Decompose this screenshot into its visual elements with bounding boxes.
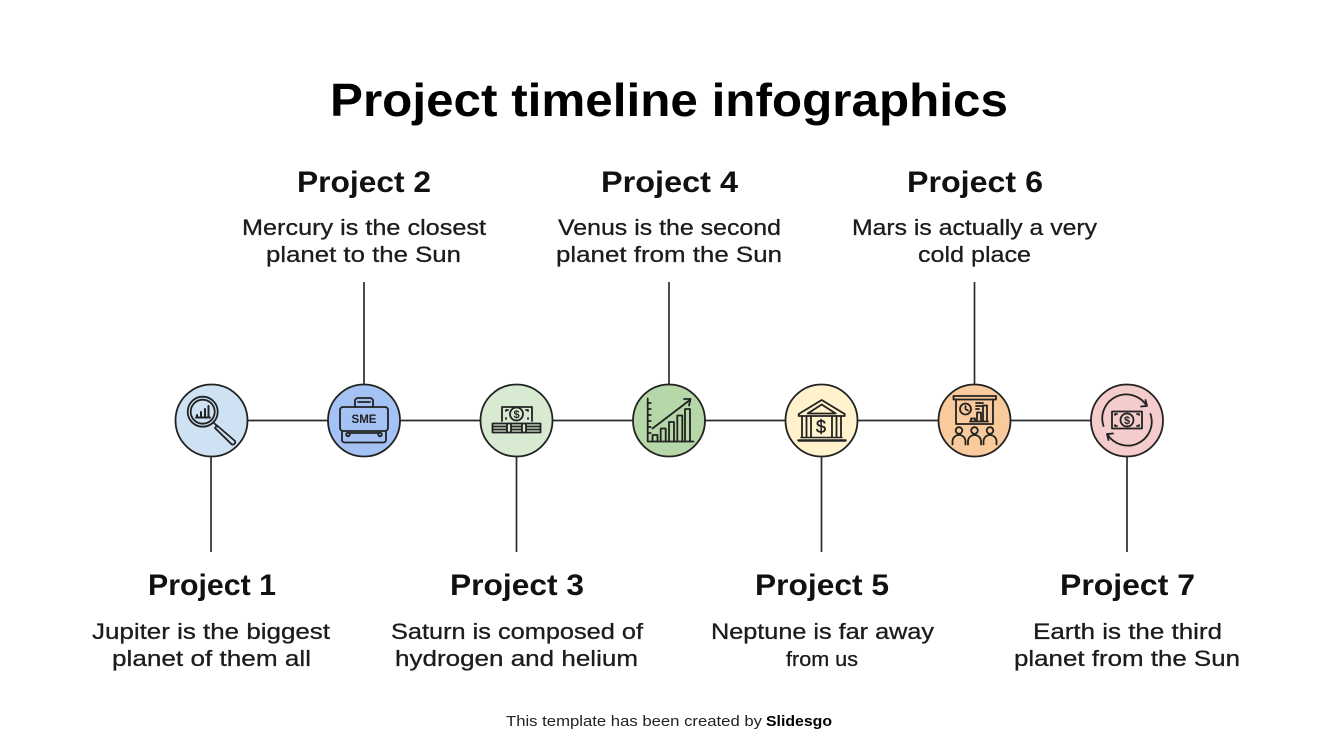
label: project 1 (92, 569, 331, 671)
icon: circulating banknote: $ (1124, 415, 1130, 427)
label: project 5: Project 5 (755, 569, 889, 602)
icon: bank building: $ (816, 417, 826, 437)
label: project 2: planet to the Sun (266, 242, 461, 267)
label: project 6: cold place (918, 242, 1031, 267)
label: project 2: Project 2 (297, 166, 431, 199)
label: project 6: Mars is actually a very (852, 215, 1098, 240)
label: project 4: planet from the Sun (556, 242, 782, 267)
icon: rising bar chart with arrow (648, 398, 694, 442)
label: project 7 (1014, 569, 1240, 671)
label: project 7: Project 7 (1060, 569, 1195, 602)
label: project 1: Jupiter is the biggest (92, 619, 331, 644)
milestone 5: project 5 (711, 384, 935, 671)
label: project 6: Project 6 (907, 166, 1043, 199)
label: project 4: Venus is the second (558, 215, 781, 240)
label: project 5: Neptune is far away (711, 619, 935, 644)
footer credit: This template has been created by (506, 714, 763, 730)
icon: presentation board with audience (952, 396, 996, 444)
icon: SME briefcase: SME (352, 412, 376, 426)
icon: magnifying glass with chart (188, 397, 235, 445)
label: project 7: planet from the Sun (1014, 646, 1240, 671)
footer credit (506, 714, 832, 730)
title: Project timeline infographics (330, 74, 1008, 126)
footer credit: Slidesgo (766, 714, 832, 730)
label: project 3 (391, 569, 644, 671)
icon: banknote and cash stacks: $ (514, 409, 520, 421)
label: project 3: hydrogen and helium (395, 646, 638, 671)
icon: circulating banknote (1102, 394, 1152, 446)
milestone 6: project 6 (852, 166, 1098, 456)
timeline horizontal connector (211, 420, 1127, 422)
milestone 7: project 7 (1014, 384, 1240, 671)
label: project 2: Mercury is the closest (242, 215, 487, 240)
label: project 6 (852, 166, 1098, 267)
label: project 4 (556, 166, 782, 267)
icon: bank building (798, 400, 846, 440)
label: project 7: Earth is the third (1033, 619, 1222, 644)
milestone 1: project 1 (92, 384, 331, 671)
label: project 3: Saturn is composed of (391, 619, 644, 644)
milestone 3: project 3 (391, 384, 644, 671)
label: project 5: from us (786, 648, 858, 671)
label: project 3: Project 3 (450, 569, 584, 602)
label: project 1: planet of them all (112, 646, 311, 671)
icon: banknote and cash stacks (492, 407, 540, 432)
label: project 1: Project 1 (148, 569, 276, 602)
label: project 5 (711, 569, 935, 671)
milestone 2: project 2 (242, 166, 487, 456)
milestone 4: project 4 (556, 166, 782, 456)
label: project 4: Project 4 (601, 166, 738, 199)
label: project 2 (242, 166, 487, 267)
icon: SME briefcase (340, 398, 388, 442)
